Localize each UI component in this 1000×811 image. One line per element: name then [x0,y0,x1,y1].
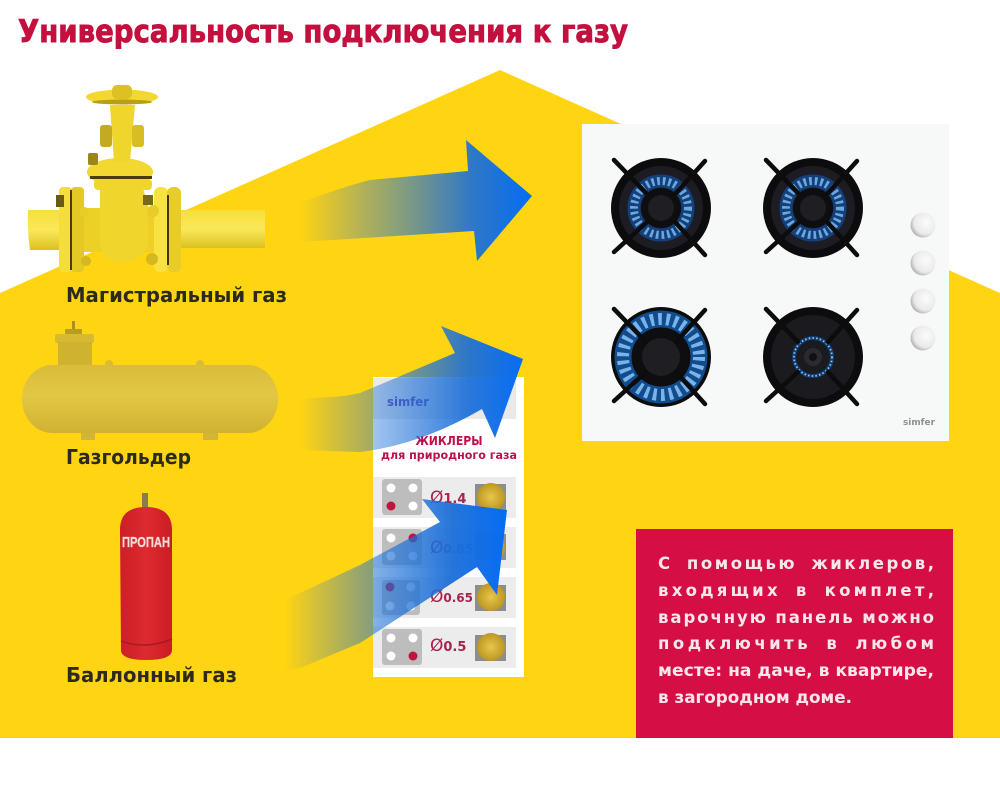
title: Универсальность подключения к газу [18,14,628,50]
arrow: cylinder to hob [285,499,507,670]
jet row 0.65 [373,577,516,618]
jet row 0.65: Ø0.65 [430,587,473,607]
callout: red text box: месте: на даче, в квартире, [658,661,934,680]
burner top left [611,158,711,258]
icon: gas holder tank [22,321,278,440]
jet row 0.5: Ø0.5 [430,636,466,656]
arrow: gas holder to hob [300,326,523,452]
simfer logo on hob: simfer [903,418,936,428]
icon: gate valve on pipeline [28,85,265,272]
callout: red text box [636,529,953,738]
callout: red text box: подключить в любом [658,634,934,653]
jet row 1.4 [373,477,516,518]
jets card heading [381,434,517,462]
label: main gas: Магистральный газ [66,283,287,307]
jets card heading: ЖИКЛЕРЫ [416,434,482,448]
jet row 0.85: Ø0.85 [430,538,473,558]
icon: propane cylinder [120,493,172,660]
callout: red text box: в загородном доме. [658,688,852,707]
label: bottled gas: Баллонный газ [66,663,237,687]
panel: gas hob [582,124,949,441]
burner bottom left [611,307,711,407]
callout: red text box: варочную панель можно [658,608,934,627]
arrow: main gas to hob [300,140,532,261]
burner bottom right [763,307,863,407]
callout: red text box: С помощью жиклеров, [658,554,934,573]
label: gas holder: Газгольдер [66,445,191,469]
burner top right [763,158,863,258]
jets card heading: для природного газа [381,448,517,462]
jet row 0.85 [373,527,516,568]
jet row 1.4: Ø1.4 [430,488,466,508]
simfer logo on jets card: simfer [387,394,430,409]
panel: jets card [373,377,524,677]
jet row 0.5 [373,627,516,668]
control knobs [910,212,936,350]
icon: propane cylinder: ПРОПАН [122,535,170,551]
callout: red text box: входящих в комплет, [658,581,934,600]
